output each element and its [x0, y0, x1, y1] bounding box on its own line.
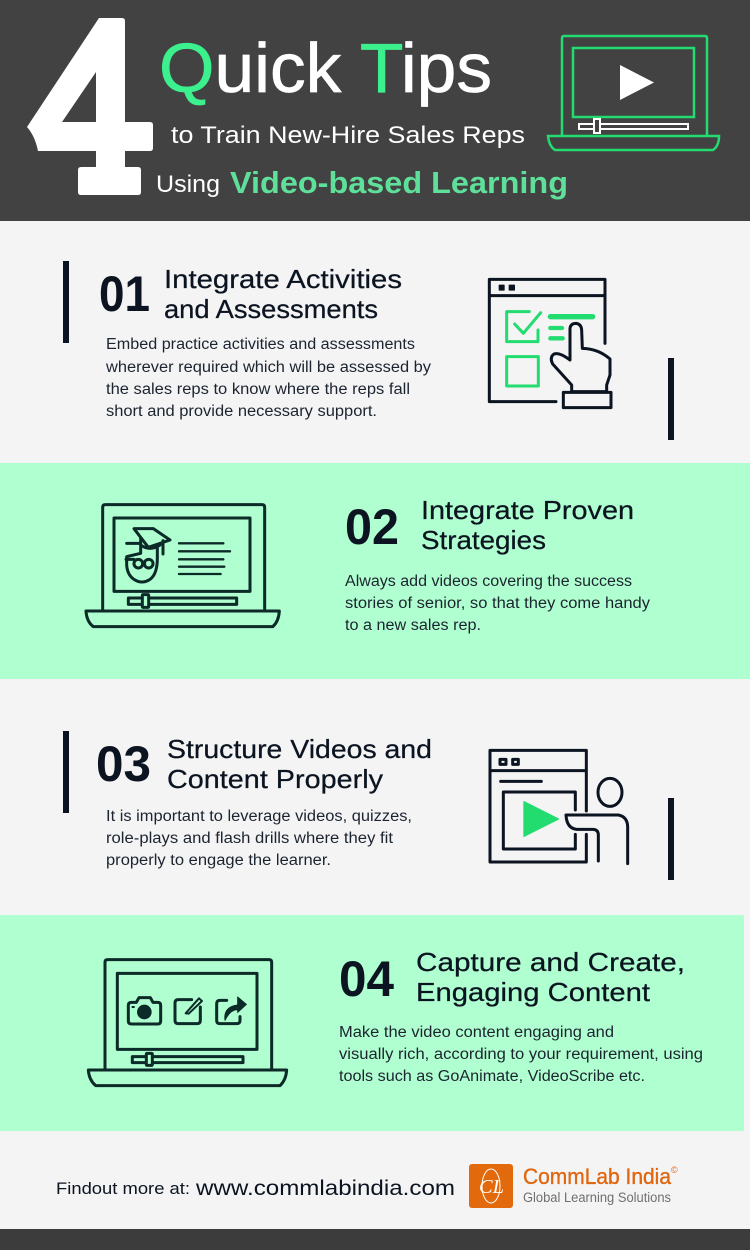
body text 04: tools such as GoAnimate, VideoScribe etc. — [339, 1068, 645, 1085]
header panel — [0, 0, 750, 221]
number 02: 02 — [345, 499, 399, 555]
icon: laptop with play button — [548, 36, 719, 150]
number 04: 04 — [339, 951, 394, 1007]
subtitle: Using: Using — [156, 171, 220, 198]
heading 04: Engaging Content — [416, 977, 651, 1007]
footer call to action: www.commlabindia.com — [195, 1177, 455, 1200]
subtitle line: to Train New-Hire Sales Reps — [171, 122, 525, 149]
body text 02: Always add videos covering the success — [345, 573, 632, 590]
body text 01: short and provide necessary support. — [106, 403, 377, 420]
heading 04: Capture and Create, — [416, 947, 685, 977]
heading 04 — [416, 947, 685, 1007]
accent bar left — [63, 261, 69, 343]
body text 03: role-plays and flash drills where they fit — [106, 830, 394, 847]
body text 04: Make the video content engaging and — [339, 1024, 614, 1041]
body text 01: Embed practice activities and assessments — [106, 336, 415, 353]
subtitle: Video-based Learning: Video-based Learning — [230, 165, 568, 200]
logo: CommLab India: © — [671, 1165, 678, 1175]
body text 03 — [106, 808, 412, 869]
body text 04 — [339, 1024, 703, 1085]
heading 02: Integrate Proven — [421, 495, 634, 525]
heading 03 — [167, 734, 432, 794]
body text 02: to a new sales rep. — [345, 617, 481, 634]
panel: tip 02 — [0, 463, 750, 679]
body text 02 — [345, 573, 650, 634]
logo: CommLab India: CommLab India — [523, 1164, 672, 1189]
logo: CommLab India: Global Learning Solutions — [523, 1190, 671, 1205]
heading 01: and Assessments — [164, 294, 378, 324]
icon: laptop with graduate — [86, 505, 279, 627]
footer bar — [0, 1229, 750, 1250]
body text 03: properly to engage the learner. — [106, 852, 331, 869]
icon: video window with presenter — [490, 750, 628, 864]
body text 01: the sales reps to know where the reps fall — [106, 381, 410, 398]
body text 02: stories of senior, so that they come handy — [345, 595, 650, 612]
heading 01: Integrate Activities — [164, 264, 402, 294]
heading 03: Content Properly — [167, 764, 383, 794]
title: Quick Tips: Quick Tips — [159, 29, 492, 107]
heading 02: Strategies — [421, 525, 546, 555]
icon: laptop with camera, edit and share — [88, 960, 287, 1086]
number 01: 01 — [99, 266, 150, 322]
number 03: 03 — [96, 736, 151, 792]
accent bar right — [668, 358, 674, 440]
panel: tip 04 — [0, 915, 744, 1131]
heading 02 — [421, 495, 634, 555]
footer call to action: Findout more at: — [56, 1179, 190, 1198]
body text 01 — [105, 336, 431, 420]
icon: checklist with pointing hand — [489, 279, 611, 408]
heading 01 — [164, 264, 402, 324]
body text 04: visually rich, according to your requirement, using — [339, 1046, 703, 1063]
logo: CommLab India: CL — [479, 1176, 504, 1198]
accent bar right — [668, 798, 674, 880]
body text 01: wherever required which will be assessed by — [105, 359, 431, 376]
panel: tip 03 — [0, 679, 750, 915]
panel: tip 01 — [0, 221, 750, 463]
footer call to action — [56, 1177, 455, 1200]
body text 03: It is important to leverage videos, quizzes, — [106, 808, 412, 825]
heading 03: Structure Videos and — [167, 734, 432, 764]
logo: CommLab India — [469, 1164, 678, 1208]
accent bar left — [63, 731, 69, 813]
big numeral 4 — [27, 18, 153, 195]
